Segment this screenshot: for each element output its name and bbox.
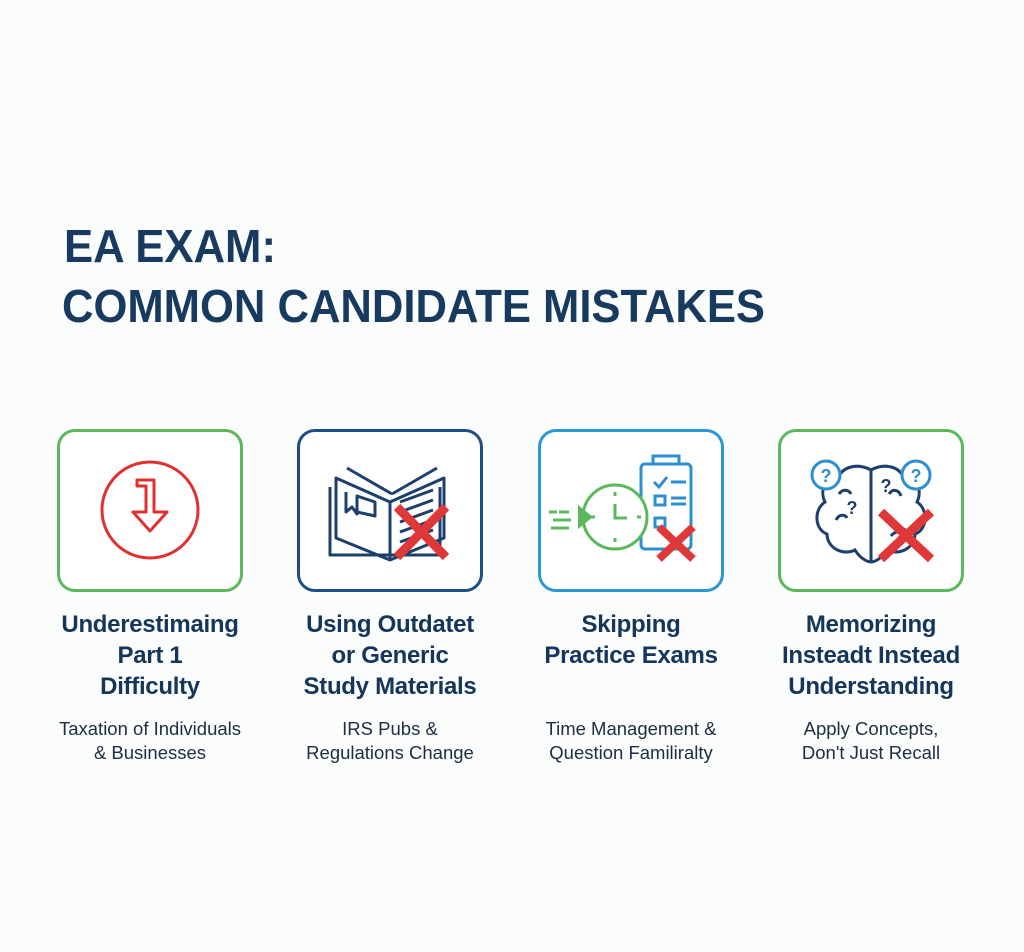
icon: brain with x: ?	[910, 466, 922, 486]
column 2 text	[304, 611, 476, 763]
text: Time Management &	[545, 718, 717, 739]
column 4 text: Understanding	[788, 673, 954, 700]
text: Don't Just Recall	[802, 742, 940, 763]
column 3 text	[544, 611, 718, 763]
column 4 text: Insteadt Instead	[782, 642, 960, 669]
panel 2 icon box	[297, 429, 483, 592]
text: Apply Concepts,	[804, 718, 938, 739]
text: & Businesses	[94, 742, 206, 763]
column 2 text: or Generic	[331, 642, 449, 669]
text: Question Familiralty	[549, 742, 713, 763]
icon: clock and checklist	[549, 454, 696, 562]
title: COMMON CANDIDATE MISTAKES	[62, 280, 765, 332]
icon: brain with x: ?	[846, 498, 858, 518]
column 1 text: Part 1	[118, 642, 182, 669]
column 2 text: Study Materials	[304, 673, 476, 700]
text: Regulations Change	[306, 742, 474, 763]
icon: brain with x: ?	[820, 466, 832, 486]
column 4 text: Memorizing	[806, 611, 936, 638]
column 3 text: Practice Exams	[544, 642, 718, 669]
column 1 text: Underestimaing	[61, 611, 239, 638]
column 3 text: Skipping	[582, 611, 680, 638]
column 4 text	[782, 611, 960, 763]
column 2 text: Using Outdatet	[306, 611, 474, 638]
title: EA EXAM:	[64, 220, 276, 272]
panel 4 icon box	[778, 429, 964, 592]
icon: down arrow 1	[100, 460, 200, 560]
icon: brain with x	[810, 460, 934, 564]
icon: brain with x: ?	[880, 476, 892, 496]
icon: book with x	[328, 466, 450, 562]
panel 1 icon box	[57, 429, 243, 592]
title	[62, 220, 765, 332]
panel 3 icon box	[538, 429, 724, 592]
text: IRS Pubs &	[342, 718, 438, 739]
text: Taxation of Individuals	[59, 718, 241, 739]
column 1 text: Difficulty	[100, 673, 200, 700]
column 1 text	[59, 611, 241, 763]
